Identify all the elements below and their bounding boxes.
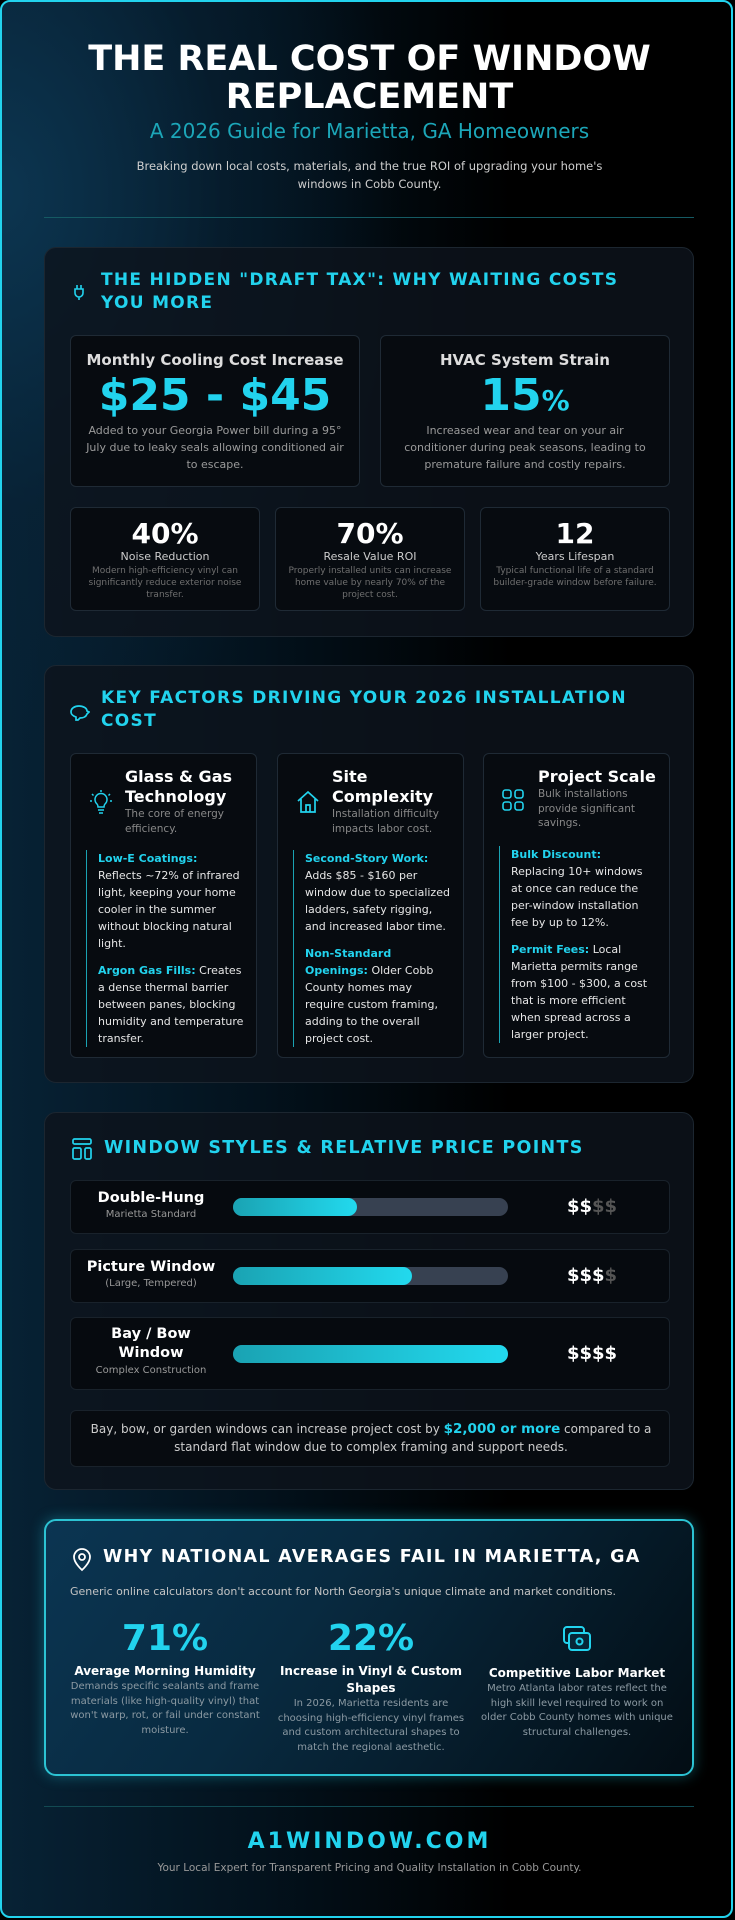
stat: noise: Modern high-efficiency vinyl can significantly reduce exterior noise transfer. [89,566,241,600]
title: THE REAL COST OF WINDOW [88,39,651,79]
card: cooling cost: Monthly Cooling Cost Increase [86,351,344,369]
row: bay/bow: $$$$ [567,1343,617,1364]
intro: Generic online calculators don't account for North Georgia's unique climate and market conditions. [70,1585,616,1598]
heading [100,270,618,313]
card: glass & gas: Glass & Gas [125,767,232,786]
intro text [137,159,602,191]
card: cooling cost [70,335,360,487]
heading: YOU MORE [101,293,213,313]
card: project scale: Replacing 10+ windows [511,865,642,878]
card: project scale: Permit Fees: Local [511,943,621,956]
footer brand: A1WINDOW.COM [248,1829,491,1854]
card: project scale: savings. [538,817,581,829]
card: site complexity: Non-Standard [305,947,391,960]
heading: KEY FACTORS DRIVING YOUR 2026 INSTALLATION [101,688,627,708]
stat: vinyl [278,1618,464,1752]
panel: national averages [44,1519,694,1776]
row: double-hung: Marietta Standard [106,1209,196,1220]
stat: resale: 70% [336,517,404,550]
card: project scale: that is more efficient [511,994,626,1007]
footer tagline: Your Local Expert for Transparent Pricing and Quality Installation in Cobb County. [157,1862,582,1874]
card: glass & gas: Argon Gas Fills: Creates a dense thermal barrier between panes, blocking humidity and temperature transfer. [98,964,243,1045]
card: hvac strain: 15% [480,370,570,421]
stat: labor market: Competitive Labor Market [489,1666,665,1680]
card: project scale: Project Scale [538,767,656,786]
icon: grid [502,789,524,811]
card: cooling cost: July due to leaky seals allowing conditioned air [86,441,344,454]
icon: layout [72,1138,92,1160]
card: project scale: from $100 - $300, a cost [511,977,647,990]
stat: lifespan: Years Lifespan [536,550,614,563]
heading: THE HIDDEN "DRAFT TAX": WHY WAITING COSTS [101,270,618,290]
card: site complexity: Installation difficulty [332,808,439,820]
stat: noise: 40% [131,517,199,550]
card: project scale: when spread across a [511,1011,631,1024]
stat: vinyl: Increase in Vinyl & Custom Shapes [280,1664,462,1695]
card: project scale: Marietta permits range [511,960,638,973]
stat: vinyl: 22% [328,1618,414,1659]
card: project scale: fee by up to 12%. [511,916,609,929]
card: project scale: per-window installation [511,899,639,912]
card: cooling cost: to escape. [186,458,244,471]
card: project scale: larger project. [511,1028,589,1041]
stat: humidity: Average Morning Humidity [74,1664,256,1678]
card: glass & gas: The core of energy [125,808,224,820]
stat: resale: Properly installed units can increase home value by nearly 70% of the project cost. [289,566,451,600]
stat: vinyl: In 2026, Marietta residents are choosing high-efficiency vinyl frames and custom architectural shapes to match the regional aesthetic. [278,1698,464,1752]
stat: humidity: Demands specific sealants and frame materials (like high-quality vinyl) that won't warp, rot, or fail under constant moisture. [70,1681,260,1736]
row: bay/bow: Window [118,1345,184,1361]
card: hvac strain [380,335,670,487]
card: site complexity: impacts labor cost. [332,822,432,834]
icon: plug [74,285,84,300]
row: bay/bow: Bay / Bow [111,1326,191,1342]
stat: lifespan [480,507,670,611]
icon: money [563,1626,591,1651]
row: double-hung: Double-Hung [98,1190,204,1206]
callout note [70,1410,670,1467]
row: double-hung: $$$$ [567,1196,617,1217]
subtitle: A 2026 Guide for Marietta, GA Homeowners [150,119,589,143]
row: double-hung [70,1180,670,1234]
card: glass & gas: Technology [125,787,226,806]
card: glass & gas: Low-E Coatings: [98,852,197,865]
icon: bulb [90,790,112,814]
stat: humidity [70,1618,260,1736]
stat: noise: Noise Reduction [120,550,210,563]
stat: resale: Resale Value ROI [324,550,416,563]
card: hvac strain: HVAC System Strain [440,351,610,369]
card: cooling cost: Added to your Georgia Power bill during a 95° [88,424,342,437]
card: glass & gas: Reflects ~72% of infrared light, keeping your home cooler in the summer without blocking natural light. [98,869,240,950]
card: site complexity: Second-Story Work: [305,852,428,865]
stat: humidity: 71% [122,1618,208,1659]
card: site complexity: Site [332,767,368,786]
heading [101,688,627,731]
card: glass & gas [70,753,257,1058]
card: project scale: provide significant [538,802,635,814]
card: project scale: at once can reduce the [511,882,638,895]
stat: resale [275,507,465,611]
stat: labor market [481,1626,673,1738]
icon: house [298,791,318,813]
stat: lifespan: Typical functional life of a standard builder-grade window before failure. [493,566,657,588]
panel: window styles [44,1112,694,1490]
row: bay/bow [70,1317,670,1390]
icon: piggy [70,705,90,721]
panel: hidden draft tax [44,247,694,637]
panel: key factors [44,665,694,1083]
card: site complexity: Complexity [332,787,433,806]
intro text: windows in Cobb County. [298,177,441,191]
row: picture: $$$$ [567,1265,617,1286]
card: project scale: Bulk installations [538,788,628,800]
card: site complexity: Adds $85 - $160 per window due to specialized ladders, safety rigging, and increased labor time. [305,869,450,933]
row: picture [70,1249,670,1303]
callout note: Bay, bow, or garden windows can increase project cost by $2,000 or more compared to a [91,1421,651,1437]
intro text: Breaking down local costs, materials, and the true ROI of upgrading your home's [137,159,602,173]
row: bay/bow: Complex Construction [96,1365,206,1376]
callout note: standard flat window due to complex framing and support needs. [174,1440,568,1454]
heading: WHY NATIONAL AVERAGES FAIL IN MARIETTA, GA [103,1547,641,1567]
stat: lifespan: 12 [556,517,594,550]
card: project scale: Bulk Discount: [511,848,601,861]
heading: WINDOW STYLES & RELATIVE PRICE POINTS [104,1138,584,1158]
row: picture: (Large, Tempered) [105,1278,197,1289]
row: picture: Picture Window [87,1259,215,1275]
card: site complexity: Openings: Older Cobb County homes may require custom framing, adding to the overall project cost. [305,964,438,1045]
card: site complexity [277,753,464,1058]
title: REPLACEMENT [226,77,513,117]
card: hvac strain: Increased wear and tear on your air conditioner during peak seasons, leading to premature failure and costly repairs. [404,424,646,471]
card: cooling cost: $25 - $45 [99,370,331,421]
title [88,39,651,117]
card: glass & gas: efficiency. [125,822,177,834]
stat: noise [70,507,260,611]
stat: labor market: Metro Atlanta labor rates reflect the high skill level required to work on older Cobb County homes with unique structural challenges. [481,1683,673,1738]
heading: COST [101,711,157,731]
icon: location pin [73,1548,91,1572]
card: project scale [483,753,670,1058]
